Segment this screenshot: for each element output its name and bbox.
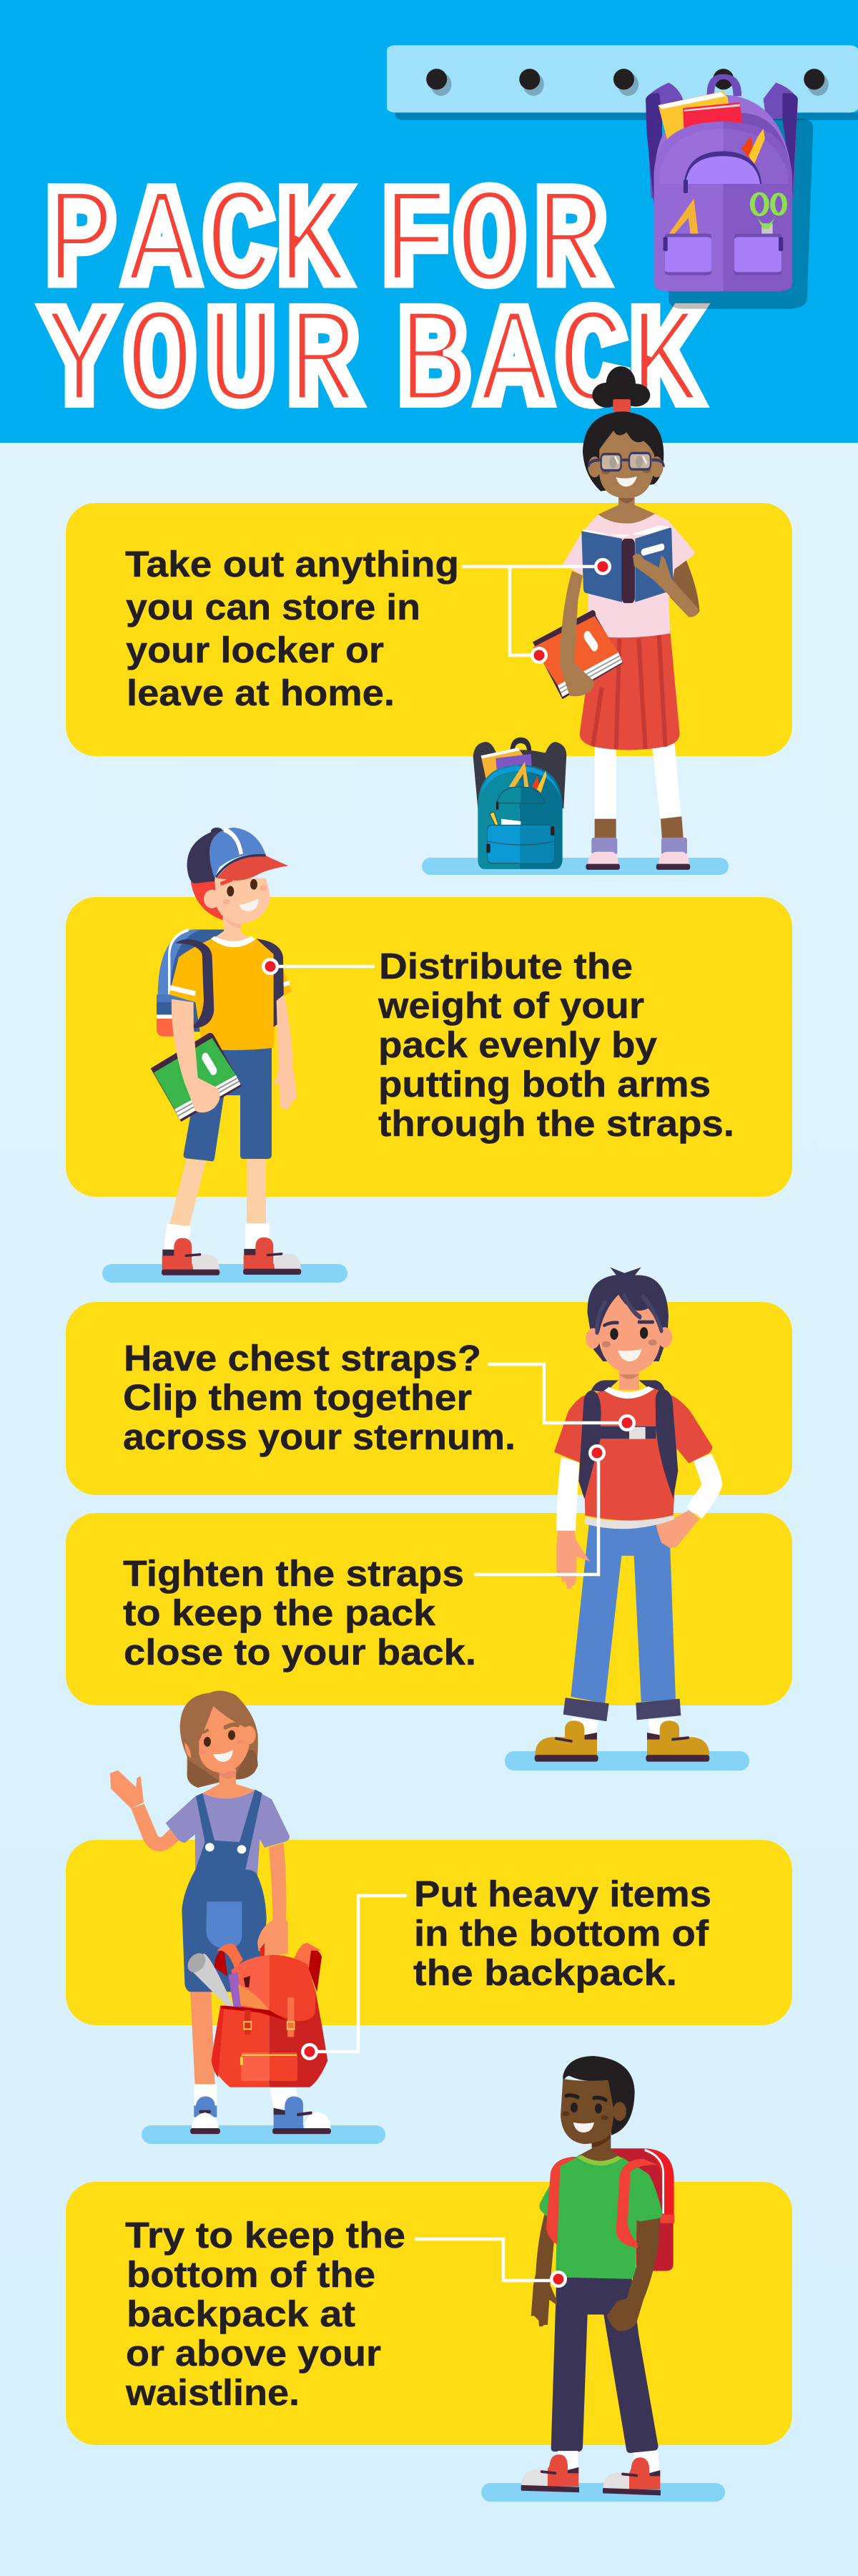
text: chest straps: Have chest straps? — [124, 1338, 481, 1378]
text: chest straps — [123, 1338, 516, 1457]
left leg — [190, 1989, 331, 2134]
panel: take out anything — [66, 503, 792, 756]
text: heavy items: in the bottom of — [414, 1913, 709, 1954]
legs — [586, 741, 690, 870]
shirt — [166, 1790, 290, 1876]
text: distribute the weight: pack evenly by — [378, 1024, 658, 1065]
text: distribute the weight — [378, 946, 734, 1144]
panel: tighten the straps — [66, 1513, 792, 1705]
character: girl in overalls — [110, 1691, 331, 2134]
text: waistline: Try to keep the — [125, 2215, 405, 2256]
arm with book — [560, 571, 594, 696]
icon: teal backpack — [473, 738, 566, 869]
panel: chest straps — [66, 1302, 792, 1495]
green shirt — [539, 2155, 663, 2279]
text: take out anything: leave at home. — [127, 672, 395, 713]
text: take out anything: Take out anything — [125, 544, 459, 584]
text: chest straps: Clip them together — [123, 1377, 472, 1418]
text: distribute the weight: putting both arms — [378, 1064, 711, 1105]
straps front — [578, 1389, 678, 1499]
text: distribute the weight: through the straps. — [378, 1103, 734, 1144]
callout: leader lines — [270, 567, 627, 2281]
title — [45, 167, 699, 441]
legs and shoes — [162, 1159, 301, 1275]
shorts — [184, 1047, 272, 1161]
head — [586, 1268, 672, 1390]
text: heavy items: the backpack. — [413, 1952, 677, 1993]
character: boy in cap — [151, 828, 301, 1275]
red shirt — [554, 1386, 713, 1529]
right arm — [606, 2218, 660, 2331]
text: chest straps: across your sternum. — [123, 1416, 516, 1457]
text: heavy items: Put heavy items — [414, 1874, 711, 1914]
orange book — [533, 610, 623, 699]
waving arm — [110, 1771, 179, 1851]
title: YOUR BACK — [45, 288, 699, 441]
text: heavy items — [413, 1874, 711, 1993]
pants — [551, 2278, 659, 2453]
panel: heavy items — [66, 1840, 792, 2025]
title: PACK FOR — [46, 167, 604, 321]
text: tighten the straps: close to your back. — [124, 1632, 476, 1673]
text: tighten the straps — [123, 1553, 476, 1673]
reading arm — [633, 554, 699, 617]
text: take out anything: your locker or — [126, 630, 384, 670]
text: waistline: or above your — [126, 2333, 381, 2374]
character: boy with chest strap — [535, 1268, 722, 1762]
text: tighten the straps: to keep the pack — [123, 1592, 436, 1633]
jeans — [571, 1522, 676, 1703]
undersleeves and hands — [556, 1454, 722, 1589]
shirt — [563, 514, 695, 637]
header band — [0, 0, 858, 443]
hair back — [180, 1691, 258, 1788]
straps — [175, 939, 284, 1029]
right arm — [257, 1843, 288, 1957]
title: PACK FOR — [46, 167, 605, 321]
t-shirt — [169, 936, 292, 1050]
text: tighten the straps: Tighten the straps — [123, 1553, 464, 1594]
socks and shoes — [535, 1717, 709, 1762]
text: distribute the weight: weight of your — [378, 985, 644, 1026]
straps — [546, 2157, 658, 2248]
head — [561, 2056, 635, 2163]
left arm — [531, 2214, 558, 2326]
hair bun — [592, 366, 650, 408]
title: YOUR BACK — [45, 288, 699, 441]
floor shadows — [102, 858, 749, 2502]
red backpack — [185, 1943, 327, 2087]
head — [184, 1706, 256, 1787]
backpack behind — [610, 2148, 674, 2271]
text: distribute the weight: Distribute the — [379, 946, 633, 986]
text: waistline: waistline. — [125, 2372, 300, 2413]
text: take out anything — [125, 544, 459, 713]
arms — [172, 994, 297, 1112]
hook rail — [387, 45, 858, 120]
skirt — [580, 632, 680, 750]
cuffs — [563, 1698, 681, 1721]
text: waistline — [125, 2215, 405, 2413]
backpack behind — [157, 929, 224, 1037]
character: girl reading — [533, 366, 699, 870]
text: take out anything: you can store in — [126, 587, 420, 627]
panel: distribute the weight — [66, 897, 792, 1197]
callout: marker dots — [262, 558, 636, 2288]
overalls — [182, 1790, 267, 1992]
socks and shoes — [521, 2451, 661, 2495]
open blue book — [581, 525, 674, 603]
head — [187, 828, 288, 947]
backpack straps upper — [591, 1380, 665, 1392]
text: waistline: bottom of the — [127, 2254, 375, 2295]
icon: purple backpack on hook — [646, 74, 813, 309]
face — [588, 431, 664, 509]
panel: waistline — [66, 2182, 792, 2445]
green book — [151, 1033, 242, 1122]
text: waistline: backpack at — [127, 2293, 355, 2334]
character: boy with red backpack — [521, 2056, 674, 2495]
